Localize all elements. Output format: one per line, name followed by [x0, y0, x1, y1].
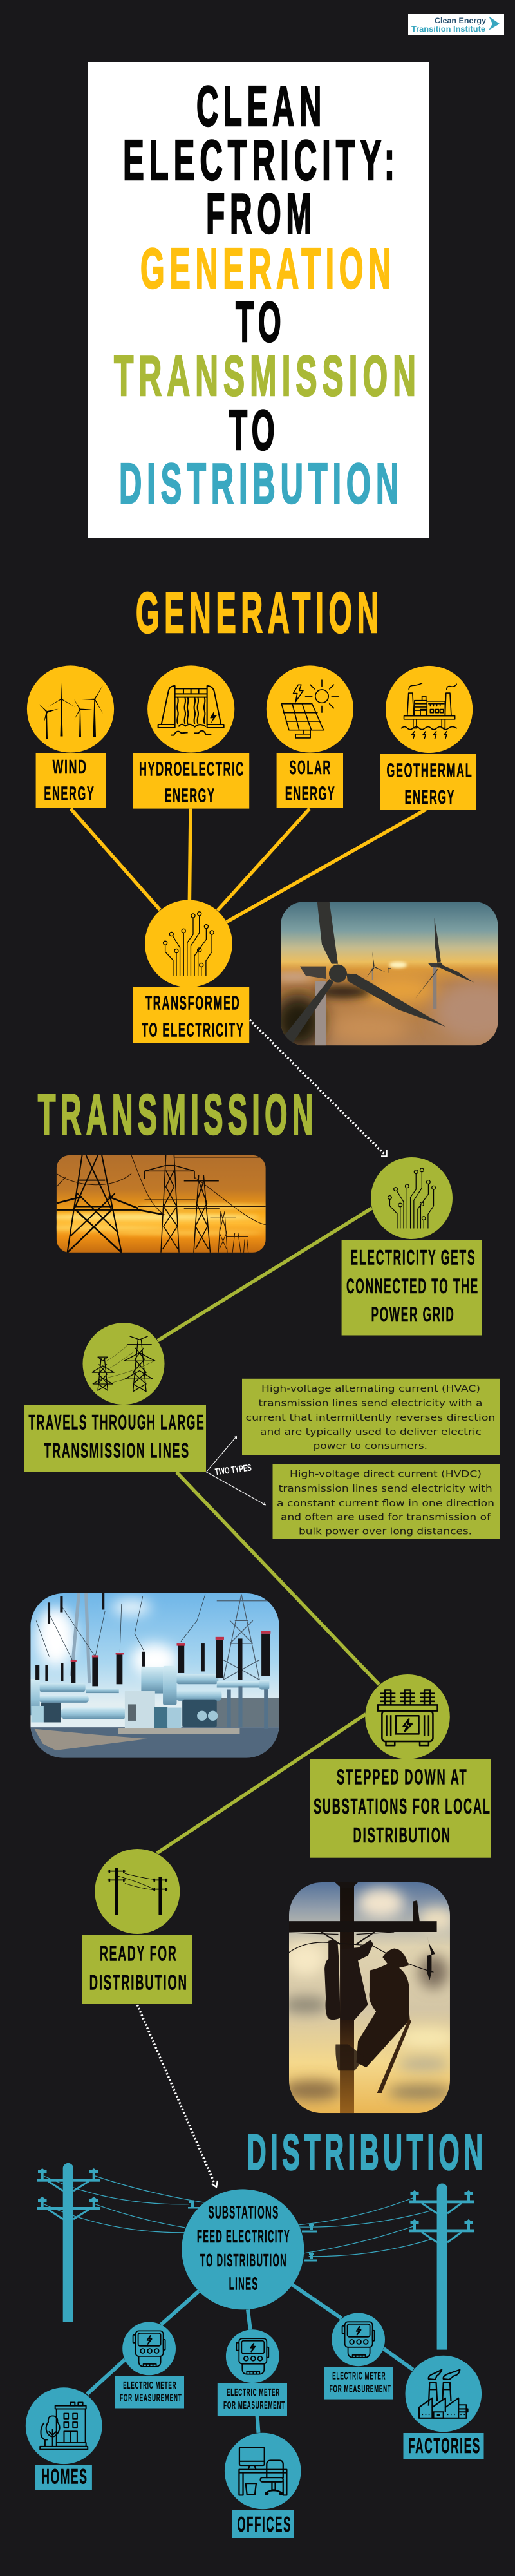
label: ready for distribution: READY FOR	[100, 1942, 178, 1965]
hub: substations feed electricity to distribution lines: FEED ELECTRICITY	[197, 2226, 290, 2246]
icon: electric meter	[236, 2338, 268, 2374]
label: wind energy	[36, 753, 106, 808]
label: solar energy: ENERGY	[285, 782, 335, 804]
title card: CLEAN	[196, 74, 326, 138]
text box: HVAC: transmission lines send electricity with a	[259, 1399, 483, 1409]
photo: wind turbines at sunrise	[281, 902, 498, 1046]
label: solar energy: SOLAR	[290, 757, 332, 779]
connector line: grid to transmission lines	[158, 1208, 372, 1341]
label: hydroelectric energy	[133, 753, 249, 809]
title card	[88, 62, 429, 538]
hub: substations feed electricity to distribution lines	[182, 2189, 304, 2309]
label: electric meter	[218, 2383, 287, 2416]
arrows: two types	[206, 1437, 265, 1505]
label: travels through large transmission lines: TRAVELS THROUGH LARGE	[28, 1410, 205, 1434]
photo: lineworker on pole	[283, 1882, 456, 2113]
label: offices	[232, 2510, 294, 2538]
label: geothermal energy: ENERGY	[405, 786, 455, 808]
node: electric meter, offices branch	[218, 2329, 287, 2416]
icon: electric meter	[342, 2322, 375, 2358]
label: wind energy: ENERGY	[44, 782, 95, 804]
node: factories	[403, 2356, 484, 2459]
text box: HVDC: bulk power over long distances.	[299, 1527, 472, 1537]
text box: HVDC: High-voltage direct current (HVDC)	[290, 1469, 482, 1479]
label: transformed to electricity	[133, 987, 249, 1043]
node: hydroelectric energy	[133, 665, 249, 809]
text box: HVAC: High-voltage alternating current (HVAC)	[261, 1384, 480, 1394]
icon: transformer	[378, 1690, 438, 1745]
label: ready for distribution: DISTRIBUTION	[89, 1971, 188, 1994]
node: geothermal energy	[380, 666, 476, 810]
logo: Clean Energy Transition Institute	[408, 14, 504, 35]
node: electric meter, factories branch	[324, 2313, 393, 2400]
icon: electric meter	[133, 2331, 165, 2367]
node: transformed to electricity	[133, 900, 249, 1043]
label: homes	[35, 2465, 92, 2490]
label: hydroelectric energy: HYDROELECTRIC	[139, 759, 245, 781]
icon: apartment building and tree	[40, 2402, 88, 2450]
icon: utility poles	[108, 1868, 167, 1915]
connector lines: energy sources to electricity	[71, 809, 426, 922]
dotted arrow: transmission to distribution	[137, 2005, 218, 2187]
label: homes: HOMES	[41, 2465, 88, 2488]
label: offices: OFFICES	[237, 2512, 292, 2536]
logo: Clean Energy Transition Institute: Transition Institute	[411, 24, 485, 33]
label: transformed to electricity: TO ELECTRICITY	[142, 1019, 245, 1041]
photo: pylons at sunset	[57, 1155, 266, 1253]
label: solar energy	[277, 753, 343, 808]
label: hydroelectric energy: ENERGY	[165, 784, 216, 806]
icon: solar panel and sun	[281, 680, 339, 738]
text box: HVDC: a constant current flow in one direction	[277, 1499, 494, 1509]
label: electric meter	[324, 2367, 393, 2400]
photo: substation	[30, 1593, 279, 1759]
label: electric meter	[115, 2376, 184, 2409]
label: electric meter: FOR MEASUREMENT	[120, 2393, 182, 2403]
label: two types: TWO TYPES	[214, 1463, 252, 1477]
connector lines: distribution branches	[87, 2285, 413, 2433]
icon: factory	[419, 2370, 468, 2418]
title card: TO	[236, 290, 286, 354]
icon: circuit	[388, 1168, 435, 1228]
node: stepped down at substations	[310, 1674, 491, 1858]
icon: hydroelectric dam	[158, 686, 224, 735]
text box: HVAC: current that intermittently reverses direction	[246, 1413, 495, 1423]
hub: substations feed electricity to distribution lines: TO DISTRIBUTION	[200, 2250, 287, 2270]
power lines	[44, 2176, 434, 2257]
label: geothermal energy	[380, 754, 476, 810]
label: electric meter: FOR MEASUREMENT	[223, 2400, 285, 2411]
node: solar energy	[267, 665, 353, 808]
connector line: substations to distribution	[157, 1714, 366, 1853]
node: offices	[225, 2433, 301, 2538]
label: travels through large transmission lines: TRANSMISSION LINES	[44, 1439, 190, 1462]
text box: HVDC: and often are used for transmission of	[281, 1513, 491, 1523]
connector line: transmission lines to substations	[176, 1472, 379, 1685]
utility pole: left	[37, 2163, 200, 2322]
node: electric meter, homes branch	[115, 2322, 184, 2409]
node: ready for distribution	[82, 1849, 192, 2004]
label: transformed to electricity: TRANSFORMED	[145, 992, 240, 1014]
label: factories	[403, 2433, 484, 2459]
text box: HVAC: power to consumers.	[314, 1441, 427, 1452]
icon: office desk	[239, 2447, 286, 2495]
text box: HVAC	[242, 1379, 500, 1455]
hub: substations feed electricity to distribution lines: LINES	[229, 2274, 259, 2294]
node: travels through large transmission lines	[24, 1323, 206, 1472]
title card: FROM	[206, 182, 317, 245]
utility pole: right	[302, 2183, 474, 2350]
text box: HVDC: transmission lines send electricity with	[279, 1484, 492, 1494]
hub: substations feed electricity to distribution lines: SUBSTATIONS	[209, 2202, 279, 2222]
icon: geothermal plant	[401, 683, 456, 739]
label: electric meter: ELECTRIC METER	[123, 2380, 176, 2391]
node: homes	[26, 2387, 102, 2490]
label: ready for distribution	[82, 1935, 192, 2004]
icon: circuit	[164, 912, 214, 976]
text box: HVAC: and are typically used to deliver electric	[260, 1427, 482, 1437]
label: electric meter: ELECTRIC METER	[332, 2371, 386, 2382]
text box: HVDC	[273, 1464, 500, 1539]
title card: TO	[229, 398, 279, 462]
label: electric meter: FOR MEASUREMENT	[330, 2384, 391, 2395]
icon: wind turbines	[39, 683, 103, 739]
label: stepped down at substations	[310, 1759, 491, 1858]
node: wind energy	[27, 665, 114, 808]
node: electricity gets connected to the power grid	[342, 1157, 482, 1336]
label: wind energy: WIND	[53, 756, 88, 778]
label: electric meter: ELECTRIC METER	[227, 2387, 280, 2398]
icon: transmission towers	[92, 1336, 155, 1392]
dotted arrow: generation to transmission	[250, 1020, 386, 1157]
label: travels through large transmission lines	[24, 1405, 206, 1472]
logo: Clean Energy Transition Institute: Clean Energy	[435, 16, 486, 25]
label: connected to power grid	[342, 1240, 482, 1336]
